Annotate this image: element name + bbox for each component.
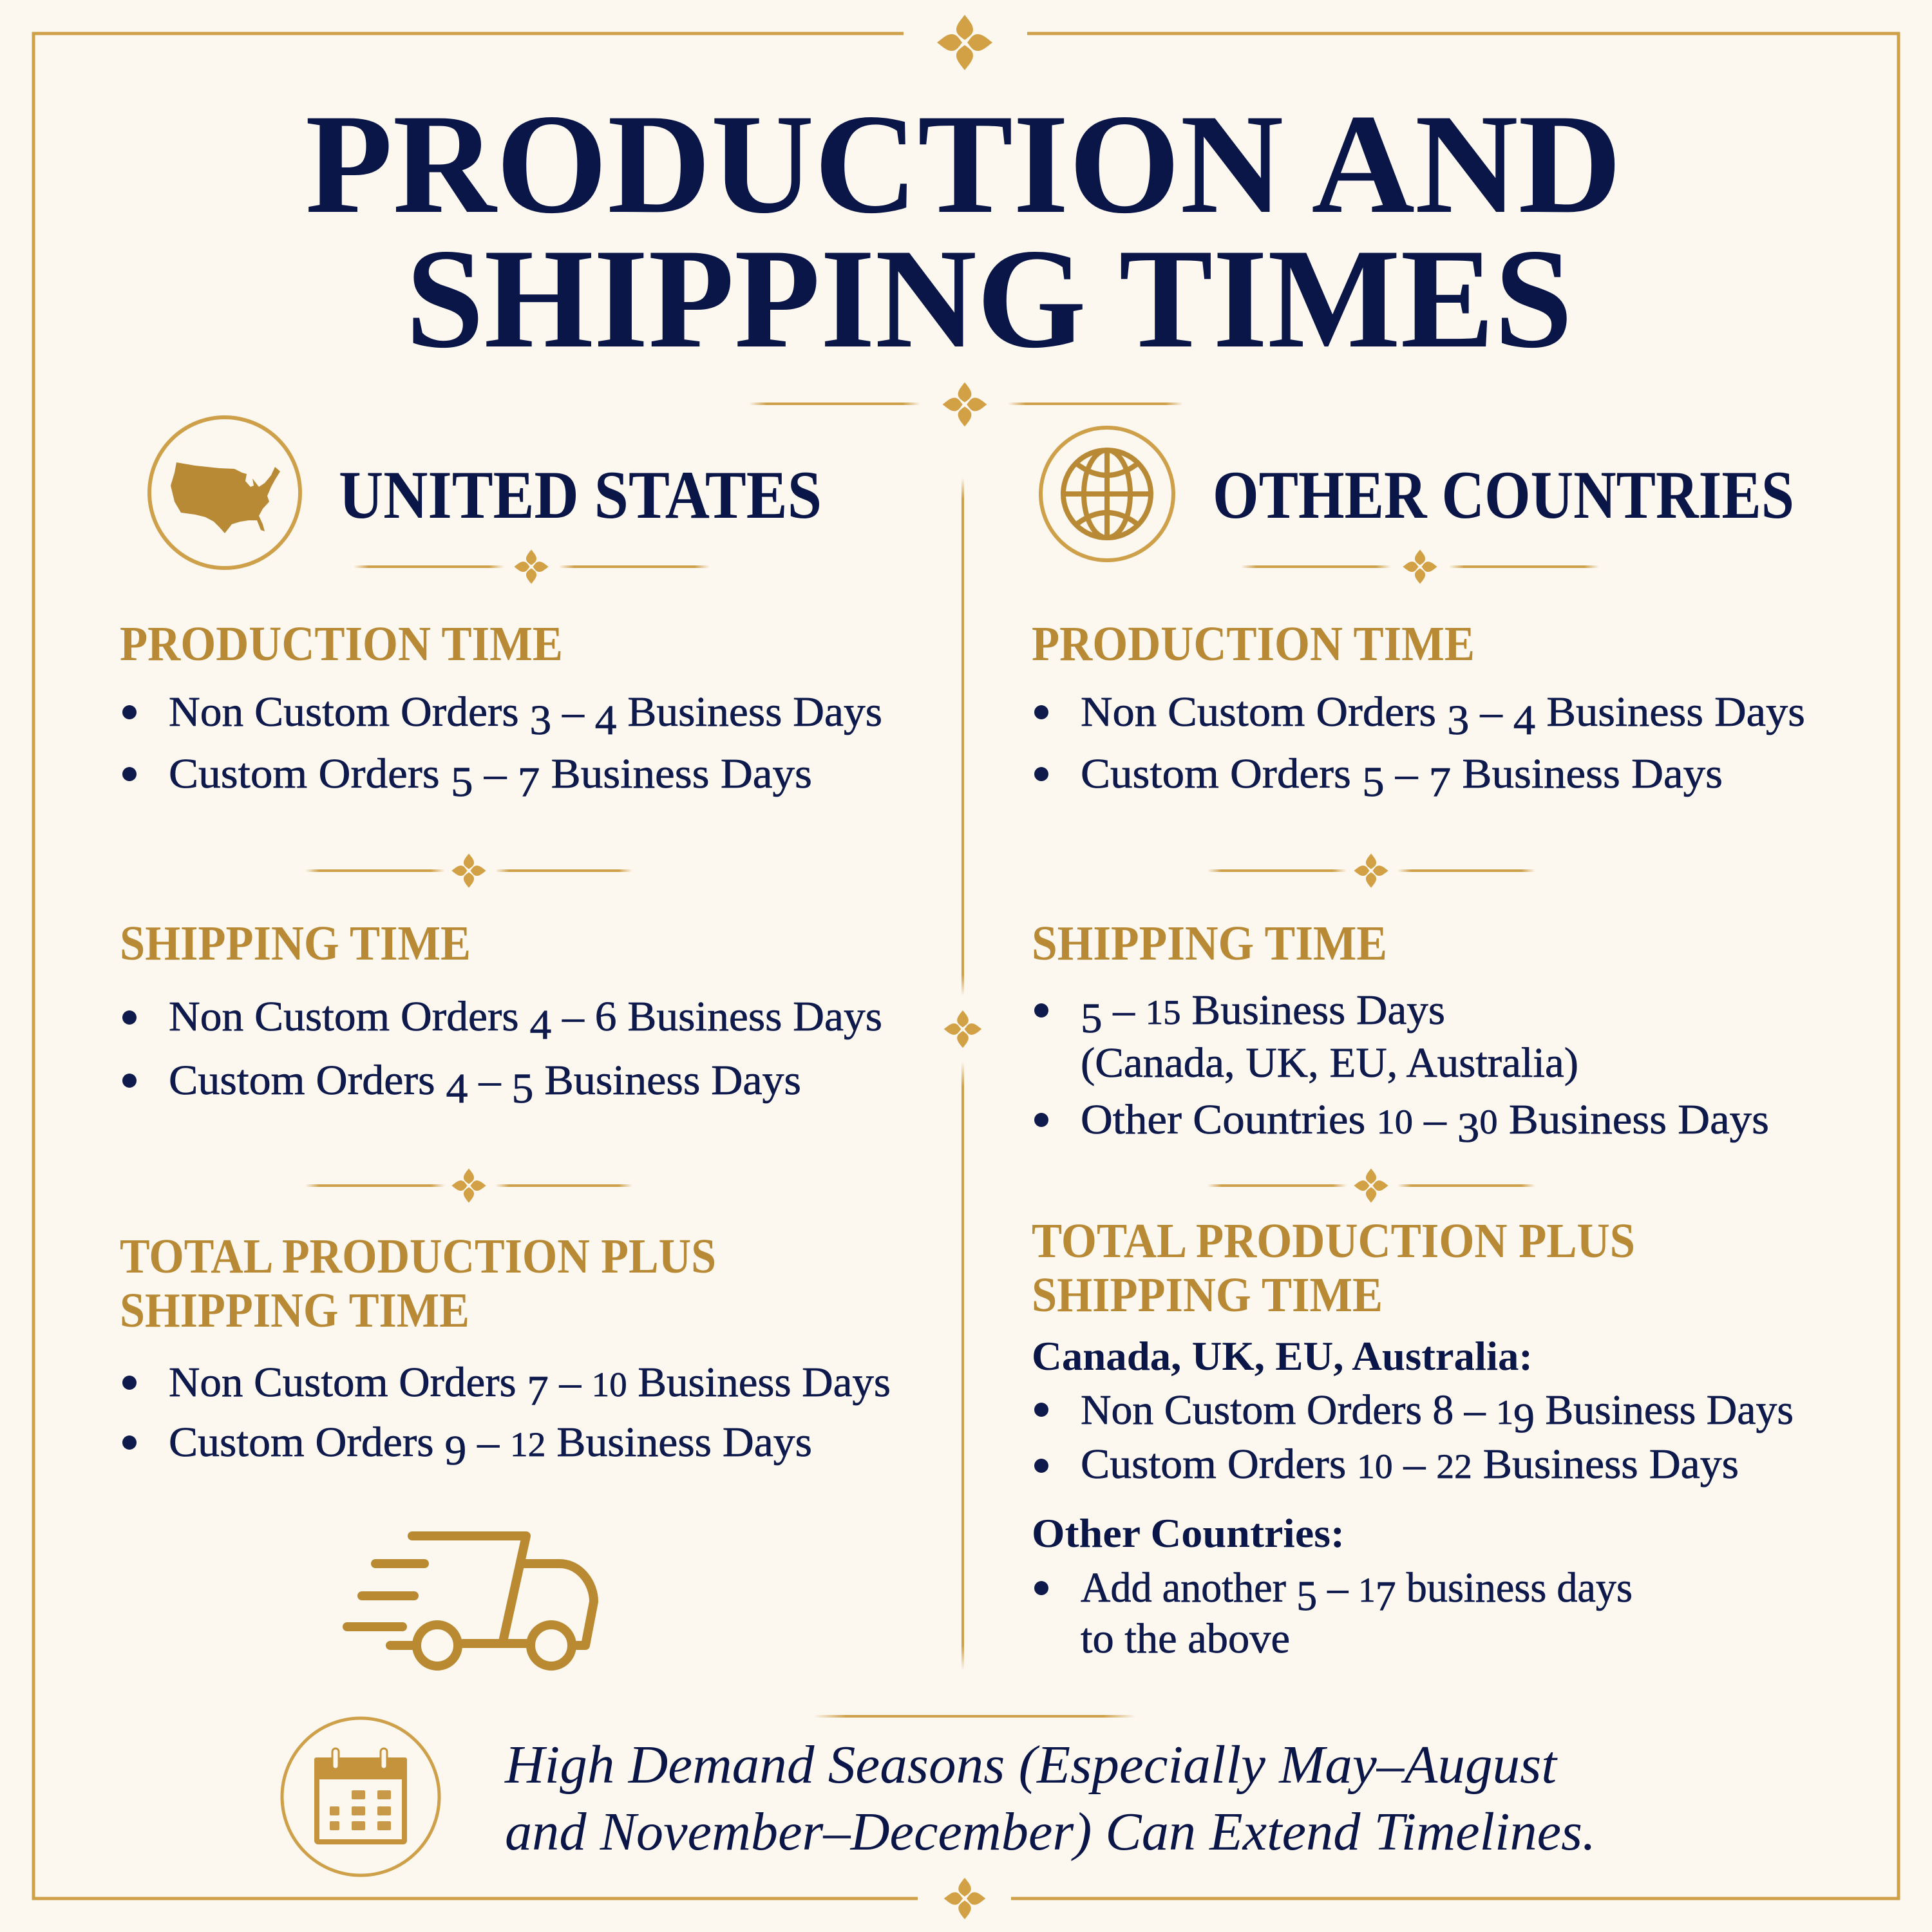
heading: united states: UNITED STATES [339, 457, 822, 533]
list: shipping time: 5 [1081, 995, 1103, 1042]
ornament: bottom [944, 1878, 985, 1919]
title [305, 85, 1622, 378]
list: production time: 3 [1447, 697, 1469, 744]
list: total time [122, 1359, 891, 1474]
list: other countries [1034, 1564, 1633, 1662]
heading: total production plus shipping time: TOTAL PRODUCTION PLUS [120, 1229, 716, 1283]
list: production time: Business Days [617, 688, 882, 735]
center divider [944, 478, 981, 1670]
list: shipping time: 0 [1479, 1103, 1498, 1141]
title: SHIPPING TIMES [406, 220, 1573, 378]
divider [305, 1168, 632, 1203]
list: shipping time [122, 993, 882, 1112]
list: production time: Non Custom Orders [169, 688, 511, 735]
title divider [749, 383, 1183, 426]
list: total time: 12 Business Days [510, 1419, 806, 1466]
list: production time: 4 [595, 697, 617, 744]
divider [305, 853, 632, 888]
list: canada uk eu australia: Custom Orders 10 – 22 Business Days [1081, 1441, 1739, 1488]
list: total time: Custom Orders [169, 1419, 427, 1466]
list: shipping time: Other Countries 10 – [1081, 1096, 1444, 1143]
heading: shipping time: SHIPPING TIME [120, 916, 471, 971]
heading: production time: PRODUCTION TIME [120, 617, 563, 671]
list: production time: Custom Orders [1081, 750, 1339, 797]
list: production time: – [1469, 688, 1513, 735]
list: production time [122, 688, 882, 806]
list: production time [1034, 688, 1805, 806]
list: shipping time: 4 [530, 1001, 551, 1048]
list: canada uk eu australia [1034, 1387, 1794, 1488]
list: production time: – [551, 688, 595, 735]
list: production time: – [1385, 750, 1429, 797]
icon: us map [149, 417, 300, 568]
list: total time: 10 Business Days [592, 1359, 887, 1406]
list: shipping time: (Canada, UK, EU, Australia) [1081, 1039, 1578, 1086]
list: production time: 7 [518, 759, 540, 806]
list: production time: Custom Orders [169, 750, 427, 797]
heading: other countries: OTHER COUNTRIES [1213, 457, 1794, 533]
list: total time: – [549, 1359, 592, 1406]
list: other countries: 1 [1358, 1571, 1376, 1609]
list: production time: Non Custom Orders [1081, 688, 1423, 735]
list: shipping time: – [1103, 987, 1146, 1034]
list: production time: Business Days [1451, 750, 1723, 797]
list: production time: 7 [1429, 759, 1451, 806]
divider [354, 549, 710, 584]
heading: production time: PRODUCTION TIME [1032, 617, 1475, 671]
divider [1208, 1168, 1535, 1203]
list: shipping time: Business Days [1508, 1096, 1757, 1143]
subheading: other countries: Other Countries: [1032, 1510, 1345, 1556]
title: PRODUCTION AND [305, 85, 1622, 243]
list: shipping time: – [468, 1057, 512, 1104]
list: production time: Business Days [1535, 688, 1805, 735]
note text: High Demand Seasons (Especially May–August [504, 1735, 1558, 1795]
divider [1208, 853, 1535, 888]
list: other countries: 7 [1376, 1573, 1396, 1620]
list: other countries: – [1317, 1564, 1358, 1611]
heading: total production plus shipping time [120, 1229, 716, 1338]
ornament: top [937, 15, 992, 70]
list: production time: 3 [530, 697, 551, 744]
list: total time: 7 [527, 1367, 549, 1414]
heading: total production plus shipping time: TOTAL PRODUCTION PLUS [1032, 1214, 1635, 1268]
list: other countries: business days [1396, 1564, 1633, 1611]
list: total time: 9 [445, 1427, 466, 1474]
list: shipping time: Custom Orders [169, 1057, 427, 1104]
list: shipping time: Non Custom Orders [169, 993, 511, 1040]
icon: globe [1041, 428, 1173, 560]
footer note [282, 1715, 1596, 1875]
list: production time: 4 [1513, 697, 1535, 744]
list: shipping time: 3 [1457, 1104, 1479, 1151]
list: total time: – [466, 1419, 510, 1466]
heading: total production plus shipping time [1032, 1214, 1635, 1322]
list: shipping time: Business Days [534, 1057, 801, 1104]
list: production time: 5 [451, 759, 473, 806]
icon: calendar [282, 1718, 439, 1875]
subheading: canada uk eu australia: Canada, UK, EU, Australia: [1032, 1333, 1533, 1379]
list: shipping time: 15 Business Days [1146, 987, 1441, 1034]
list: total time: Non Custom Orders [169, 1359, 511, 1406]
list: production time: Business Days [540, 750, 812, 797]
heading: total production plus shipping time: SHIPPING TIME [120, 1283, 469, 1338]
panel: united states [120, 417, 891, 1666]
divider [1241, 549, 1599, 584]
list: other countries: 5 [1296, 1573, 1317, 1620]
heading: shipping time: SHIPPING TIME [1032, 916, 1387, 971]
list: shipping time [1034, 987, 1769, 1151]
list: production time: – [473, 750, 518, 797]
list: shipping time: – 6 Business Days [551, 993, 882, 1040]
icon: delivery truck [347, 1536, 594, 1666]
panel: other countries [1032, 428, 1805, 1662]
note text: and November–December) Can Extend Timelines. [505, 1802, 1596, 1862]
list: shipping time: 5 [512, 1065, 534, 1112]
list: other countries: to the above [1081, 1615, 1290, 1662]
note text [504, 1735, 1596, 1862]
list: canada uk eu australia: Non Custom Orders 8 – 1 [1081, 1387, 1513, 1434]
list: other countries: Add another [1081, 1564, 1292, 1611]
heading: total production plus shipping time: SHIPPING TIME [1032, 1268, 1383, 1322]
list: production time: 5 [1362, 759, 1385, 806]
list: canada uk eu australia: 9 [1513, 1395, 1535, 1442]
list: canada uk eu australia: Business Days [1535, 1387, 1794, 1434]
list: shipping time: 4 [446, 1065, 468, 1112]
